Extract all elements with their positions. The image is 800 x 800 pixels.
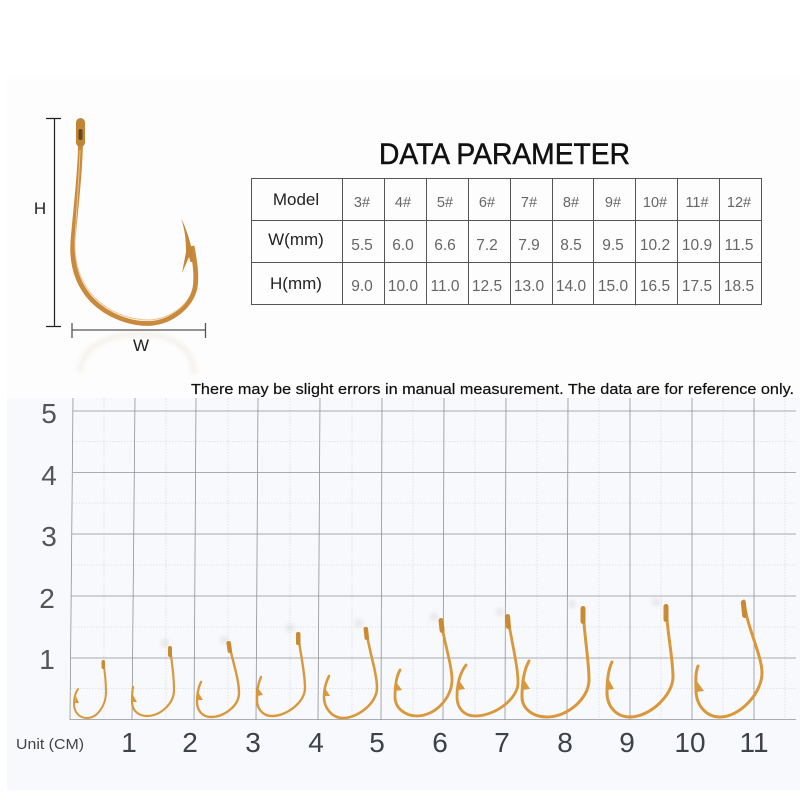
y axis labels: 3: [41, 521, 57, 552]
x axis labels: 4: [308, 727, 324, 758]
H label: H: [34, 199, 46, 218]
row: width values: [351, 237, 754, 254]
reflection of hook: [80, 334, 194, 374]
title: DATA PARAMETER: [379, 138, 630, 171]
row: width values: 11.5: [724, 237, 754, 254]
x axis labels: 7: [494, 727, 510, 758]
row: model numbers: 11#: [685, 195, 709, 211]
solid cm lines: [70, 398, 796, 720]
row: model numbers: 9#: [605, 195, 621, 211]
hook 1: [74, 662, 106, 718]
row: height values: 17.5: [682, 278, 712, 295]
hook barbs: [75, 678, 704, 703]
row of gold hooks sizes 3 to 12: [74, 598, 762, 718]
row: model numbers: 12#: [727, 195, 751, 211]
data table: [252, 178, 762, 306]
row: model numbers: 5#: [437, 195, 453, 211]
y axis labels: 1: [39, 644, 55, 675]
row: width values: 9.5: [602, 237, 624, 254]
panel: hook photo background: [7, 77, 800, 398]
row: height values: 12.5: [472, 278, 502, 295]
row: height values: [351, 278, 754, 295]
row: model numbers: 6#: [479, 195, 495, 211]
hook 10: [696, 601, 762, 717]
ruler grid: [70, 398, 796, 720]
table grid: [252, 178, 762, 306]
hook 7: [457, 617, 518, 716]
row: width values: 7.9: [518, 237, 540, 254]
W dimension line: [72, 323, 206, 338]
row: model numbers: 3#: [354, 195, 370, 211]
row: width values: 10.2: [640, 237, 670, 254]
y axis labels: 2: [39, 583, 55, 614]
row headers: Model: [273, 190, 319, 209]
diagram: large hook with dimensions: [34, 118, 206, 374]
H dimension line: [46, 118, 61, 326]
hook 5: [324, 628, 377, 718]
row headers: [268, 190, 324, 293]
unit label: Unit (CM): [16, 736, 84, 753]
x axis labels: 5: [369, 727, 385, 758]
panel: ruler grid background: [7, 398, 800, 790]
hook eyes: [102, 600, 747, 669]
row: model numbers: 4#: [395, 195, 411, 211]
row: height values: 18.5: [724, 278, 754, 295]
row headers: W(mm): [268, 230, 324, 249]
row: model numbers: 8#: [563, 195, 579, 211]
x axis labels: 8: [557, 727, 573, 758]
row: height values: 10.0: [388, 278, 418, 295]
x axis labels: [121, 727, 769, 758]
x axis labels: 10: [674, 727, 706, 758]
hook wires: [74, 601, 762, 718]
row: height values: 15.0: [598, 278, 628, 295]
y axis labels: 4: [41, 460, 57, 491]
hook 4: [257, 634, 305, 716]
row headers: H(mm): [270, 274, 322, 293]
y axis labels: [39, 398, 57, 675]
row: height values: 16.5: [640, 278, 670, 295]
W label: W: [133, 336, 149, 355]
row: width values: 8.5: [560, 237, 582, 254]
hook 6: [395, 621, 452, 716]
x axis labels: 2: [182, 727, 198, 758]
hook 3: [197, 643, 239, 717]
row: width values: 10.9: [682, 237, 712, 254]
row: width values: 5.5: [351, 237, 373, 254]
row: width values: 6.6: [434, 237, 456, 254]
x axis labels: 11: [739, 727, 769, 758]
row: model numbers: [354, 195, 751, 211]
x axis labels: 3: [245, 727, 261, 758]
row: height values: 13.0: [514, 278, 544, 295]
x axis labels: 9: [619, 727, 635, 758]
row: width values: 6.0: [392, 237, 414, 254]
row: model numbers: 7#: [521, 195, 537, 211]
x axis labels: 6: [432, 727, 448, 758]
hook 8: [522, 608, 589, 717]
disclaimer note: There may be slight errors in manual measurement. The data are for reference only.: [191, 381, 794, 398]
row: height values: 11.0: [430, 278, 460, 295]
hook 9: [607, 606, 673, 717]
row: model numbers: 10#: [643, 195, 667, 211]
icon: large gold hook: [73, 118, 196, 324]
y axis labels: 5: [41, 398, 57, 429]
row: height values: 9.0: [351, 278, 373, 295]
hook 2: [132, 648, 174, 716]
row: height values: 14.0: [556, 278, 586, 295]
row: width values: 7.2: [476, 237, 498, 254]
dotted half-cm lines: [71, 398, 796, 719]
eye shadows: [161, 598, 660, 647]
x axis labels: 1: [121, 727, 137, 758]
